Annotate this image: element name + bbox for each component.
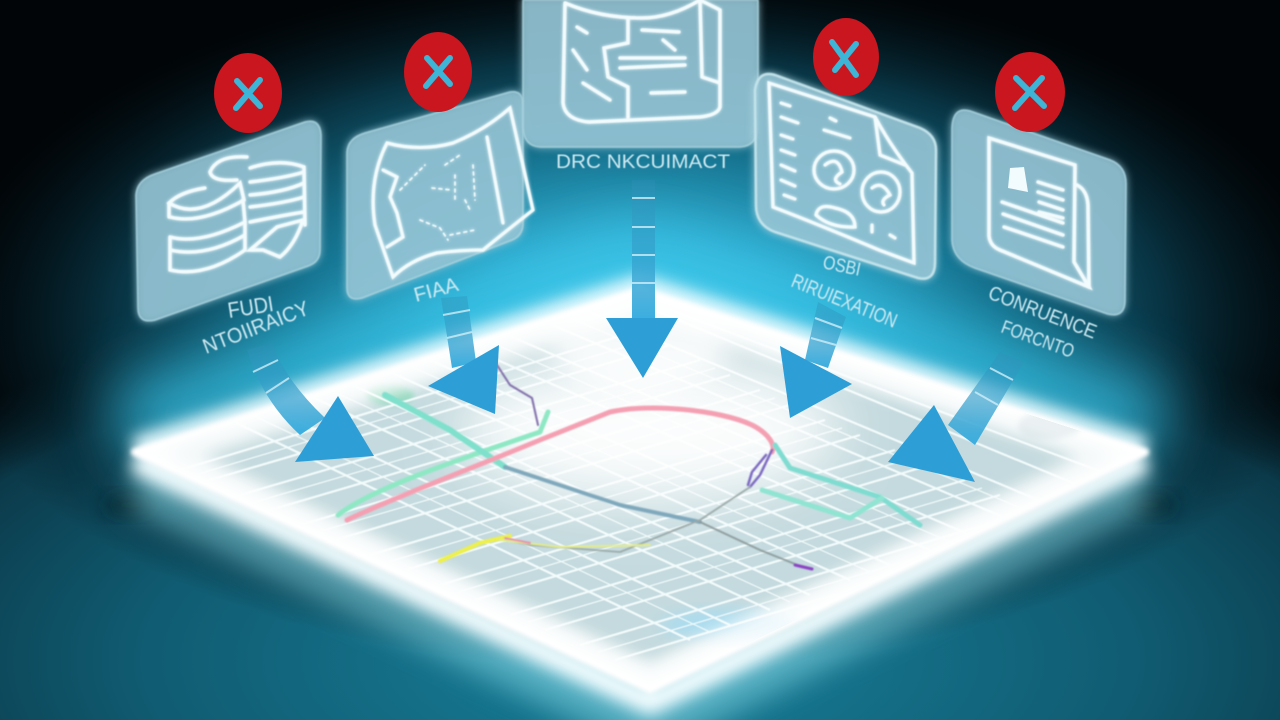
haze over map edge xyxy=(135,290,1145,690)
arrow: data to map 2 xyxy=(428,296,499,414)
panel: data redundancy xyxy=(136,53,321,359)
panel: compliance report xyxy=(952,52,1126,363)
central light on map xyxy=(460,360,840,500)
icon: red error badge xyxy=(813,18,879,96)
panel: central document xyxy=(523,0,758,173)
label: FORCNTO xyxy=(998,317,1077,363)
panel: map xyxy=(347,32,533,307)
map blocks xyxy=(194,338,1088,668)
platform side shadow xyxy=(104,493,1176,517)
arrow: data to map 1 xyxy=(247,343,374,462)
icon: blueprint xyxy=(563,0,720,122)
label: NTOIIRAICY xyxy=(200,297,312,359)
label: RIRUIEXATION xyxy=(788,270,900,333)
label: FIAA xyxy=(412,274,461,307)
map xyxy=(158,300,1122,664)
panel: user registration xyxy=(755,18,936,333)
map street grid xyxy=(202,340,1081,658)
icon: red error badge xyxy=(214,53,282,133)
card 1 xyxy=(136,121,321,321)
upper glow along platform xyxy=(120,170,1160,430)
arrow: data to map 5 xyxy=(888,352,1024,482)
icon: database stacks xyxy=(169,157,305,272)
label: CONRUENCE xyxy=(985,282,1100,344)
icon: photo block xyxy=(1008,167,1028,192)
label: DRC NKCUIMACT xyxy=(556,152,730,173)
platform with glowing edge xyxy=(135,286,1145,715)
card 4 xyxy=(755,74,936,279)
card 2 xyxy=(347,92,523,299)
icon: red error badge xyxy=(404,32,472,112)
route lines xyxy=(338,365,920,569)
label: FUDI xyxy=(226,291,275,323)
card 5 xyxy=(952,110,1126,315)
label: OSBI xyxy=(821,252,862,281)
icon: folded map xyxy=(373,108,533,277)
label xyxy=(788,252,900,333)
card 3 xyxy=(523,0,758,147)
arrow: data to map 3 xyxy=(606,180,678,378)
icon: red error badge xyxy=(995,52,1065,132)
icon: document with lines xyxy=(989,138,1089,287)
icon: document with seals xyxy=(769,83,914,263)
arrow: data to map 4 xyxy=(780,302,852,418)
